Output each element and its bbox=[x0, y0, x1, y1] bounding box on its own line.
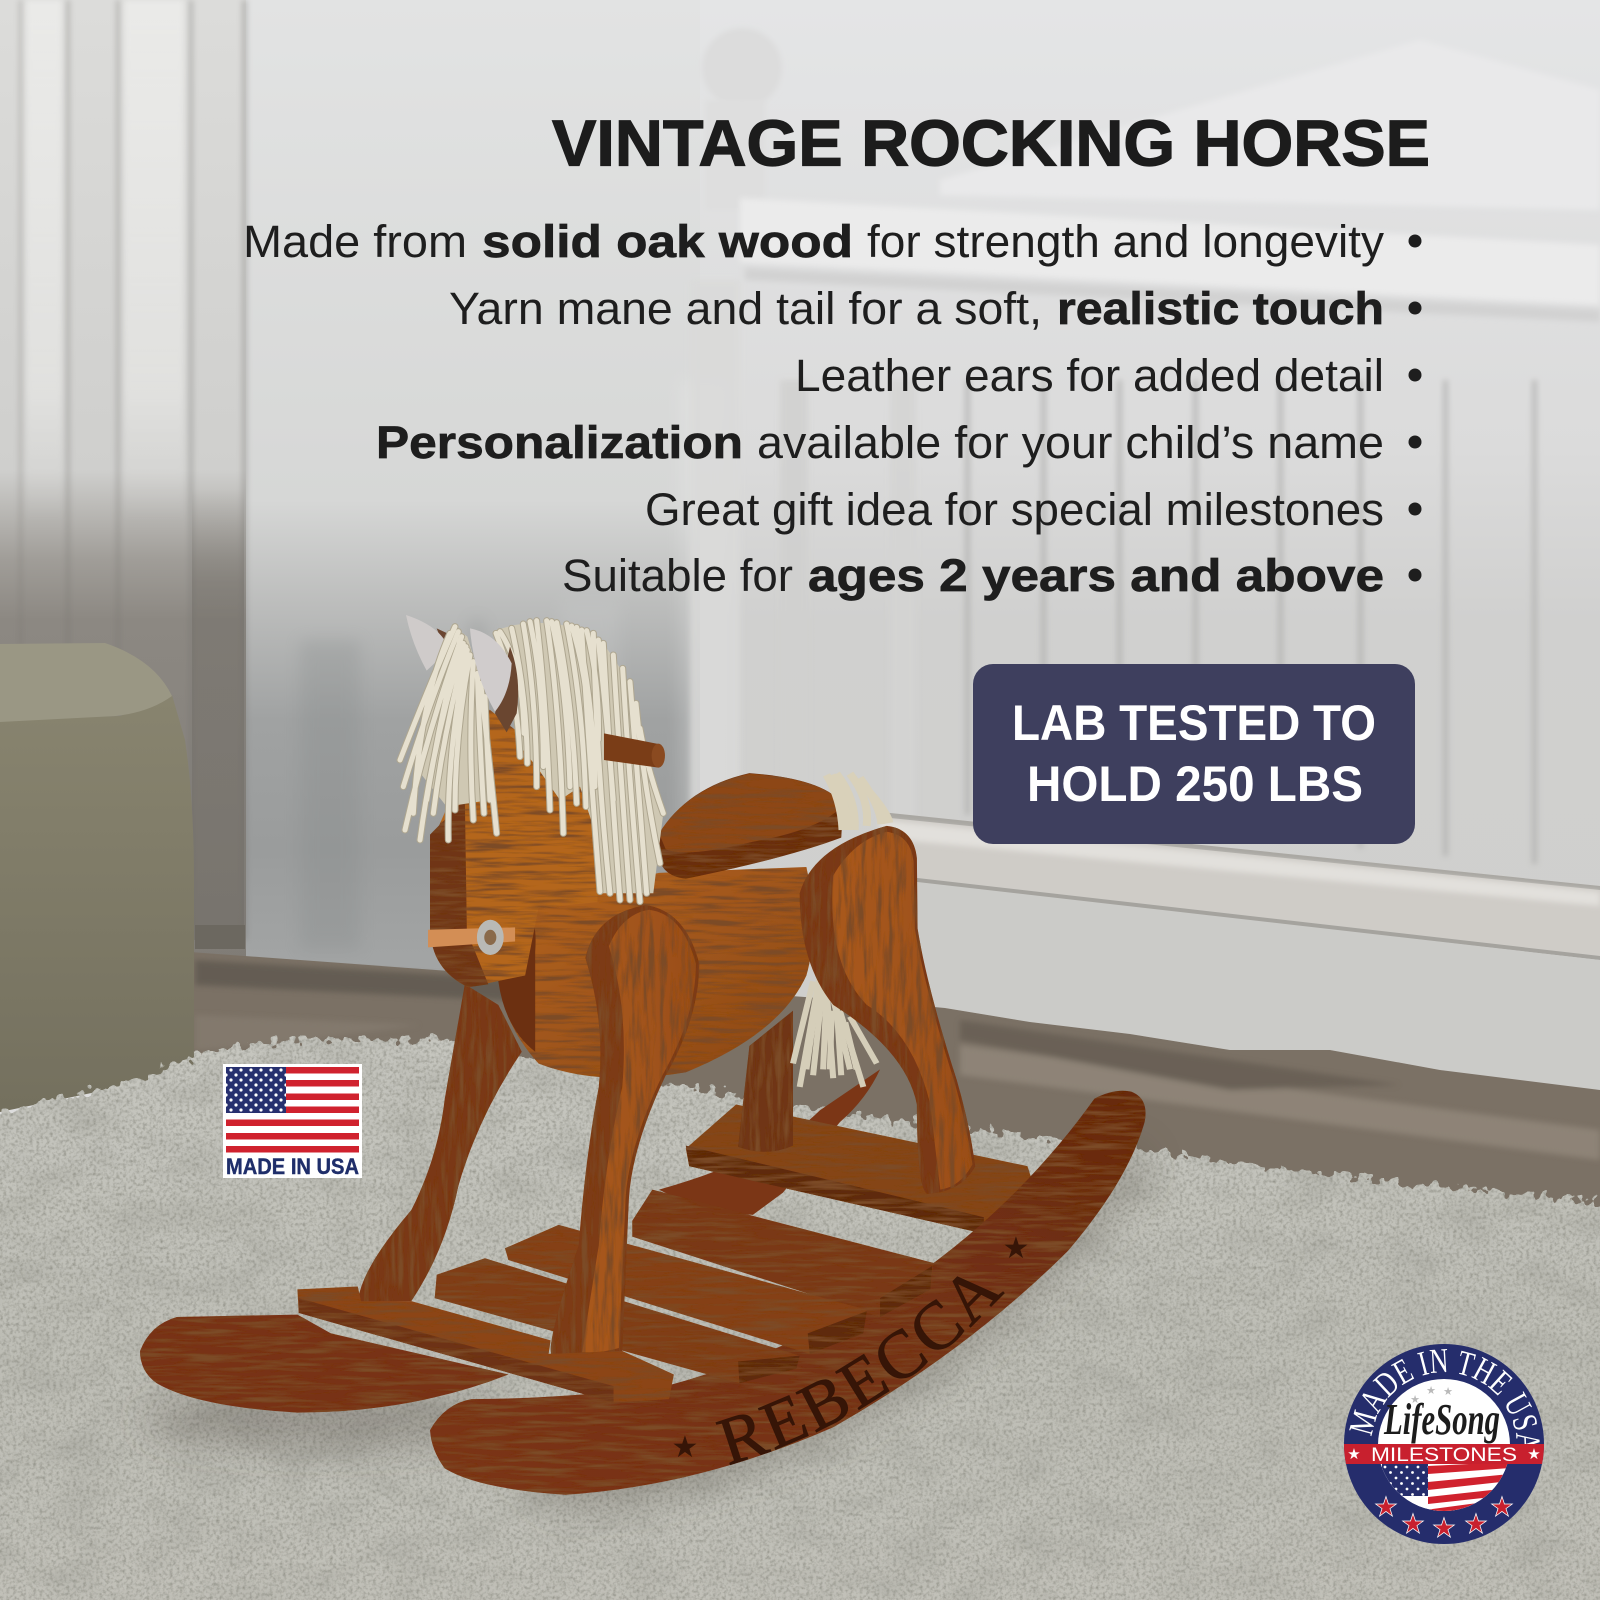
ribbon text: MILESTONES bbox=[1371, 1445, 1517, 1466]
halter bbox=[428, 920, 515, 955]
saddle seat bbox=[659, 773, 843, 879]
waving flag bbox=[1380, 1464, 1508, 1511]
ribbon stars: ★ bbox=[1527, 1446, 1541, 1463]
wood floor bbox=[190, 952, 1600, 1230]
line: solid oak wood: solid oak wood bbox=[482, 216, 853, 267]
callout: lab tested badge: LAB TESTED TO bbox=[1012, 695, 1376, 751]
pouf bbox=[0, 643, 194, 1112]
bottom red stars: ★ bbox=[1401, 1509, 1425, 1539]
bottom red stars: ★ bbox=[1432, 1513, 1456, 1543]
near hind leg bbox=[800, 826, 975, 1194]
pouf top bbox=[0, 643, 172, 722]
title: VINTAGE ROCKING HORSE bbox=[552, 106, 1430, 180]
curtain bbox=[0, 0, 247, 1000]
feature list bbox=[243, 216, 1422, 601]
upper tail bbox=[826, 774, 889, 830]
red ribbon bbox=[1340, 1444, 1550, 1464]
line: ages: ages 2 years and above bbox=[808, 550, 1384, 601]
line: yarn mane: realistic touch bbox=[1057, 283, 1384, 334]
crib rail bbox=[880, 812, 1600, 956]
rug bbox=[0, 1038, 1600, 1600]
far rocker bbox=[140, 1315, 508, 1413]
line: solid oak wood bbox=[243, 216, 1422, 267]
flag canton bbox=[226, 1067, 286, 1113]
rug shadow under horse bbox=[140, 1140, 1150, 1510]
engraved star left: ★ bbox=[672, 1431, 698, 1464]
arc text: MADE IN THE USA bbox=[1349, 1349, 1540, 1444]
line: personalization bbox=[376, 417, 1422, 468]
crib skirt bbox=[900, 880, 1600, 1090]
back platform bbox=[686, 1105, 1034, 1234]
small grey stars: ★ bbox=[1410, 1394, 1420, 1406]
rocking horse product photo bbox=[140, 710, 1146, 1495]
near ear bbox=[470, 628, 518, 732]
ribbon stars bbox=[1347, 1446, 1541, 1463]
wall vertical streaks bbox=[300, 380, 730, 950]
line: personalization: Personalization bbox=[376, 417, 743, 468]
line: solid oak wood: Made from bbox=[243, 216, 467, 267]
body bbox=[498, 867, 813, 1078]
handle peg bbox=[604, 733, 665, 768]
horse ears, mane and handle bbox=[400, 615, 665, 902]
bottom red stars: ★ bbox=[1490, 1492, 1514, 1522]
bottom red stars bbox=[1374, 1492, 1514, 1543]
callout: lab tested badge bbox=[973, 664, 1415, 844]
line: personalization: available for your child’s name bbox=[757, 417, 1384, 468]
line: yarn mane bbox=[449, 283, 1422, 334]
far rocker rear span bbox=[659, 1069, 880, 1215]
LifeSong Milestones round logo bbox=[1344, 1344, 1544, 1544]
chest strip bbox=[498, 905, 536, 1052]
bottom red stars: ★ bbox=[1374, 1492, 1398, 1522]
front platform bbox=[297, 1286, 674, 1403]
line: leather ears: Leather ears for added detail bbox=[795, 350, 1384, 401]
line: gift idea: Great gift idea for special milestones bbox=[645, 484, 1384, 535]
seat slats bbox=[435, 1190, 934, 1383]
far hind leg bbox=[738, 1011, 793, 1152]
line: yarn mane: Yarn mane and tail for a soft, bbox=[449, 283, 1042, 334]
script wordmark: LifeSong bbox=[1383, 1395, 1500, 1444]
bottom red stars: ★ bbox=[1464, 1509, 1488, 1539]
lower tail bbox=[793, 975, 877, 1087]
small grey stars: ★ bbox=[1443, 1386, 1453, 1398]
line: ages: Suitable for bbox=[562, 550, 793, 601]
flag stripes bbox=[226, 1067, 359, 1152]
yarn mane bbox=[400, 621, 663, 902]
ribbon stars: ★ bbox=[1347, 1446, 1361, 1463]
engraved name on rocker bbox=[672, 1232, 1029, 1466]
head and neck bbox=[430, 710, 599, 987]
wall panel bbox=[0, 0, 760, 1000]
crib backdrop bbox=[700, 0, 1600, 1000]
far ear bbox=[406, 615, 462, 671]
small grey stars: ★ bbox=[1426, 1385, 1436, 1397]
engraved star right: ★ bbox=[1003, 1232, 1029, 1265]
small grey stars bbox=[1410, 1385, 1453, 1406]
line: solid oak wood: for strength and longevity bbox=[867, 216, 1385, 267]
callout: lab tested badge: HOLD 250 LBS bbox=[1027, 756, 1363, 812]
far front leg bbox=[358, 984, 522, 1302]
made in USA flag label bbox=[223, 1064, 362, 1179]
line: ages bbox=[562, 550, 1422, 601]
crib structure bbox=[690, 28, 1600, 920]
label text: MADE IN USA bbox=[226, 1154, 359, 1179]
name: REBECCA: REBECCA bbox=[716, 1276, 1005, 1466]
near rocker with name bbox=[430, 1091, 1146, 1495]
near front leg bbox=[551, 905, 699, 1358]
